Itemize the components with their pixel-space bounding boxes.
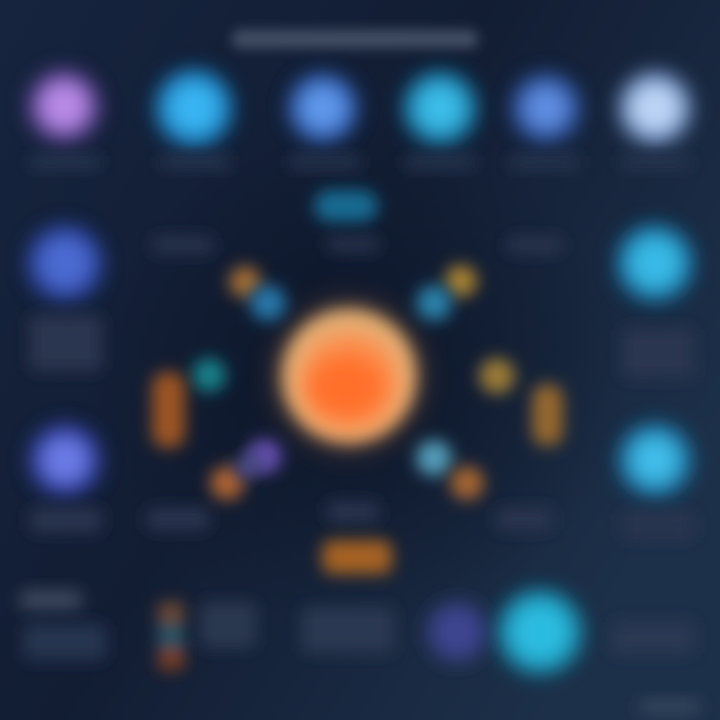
text block: bottom left label [20,590,82,610]
top centre pill [314,190,378,222]
top row captions [30,155,690,169]
capsule: lower left [210,439,282,500]
text block: bottom second [200,602,256,648]
right column icons [615,223,695,498]
icon: aqua circle [617,422,693,498]
top row icons [26,68,693,148]
orbit icons [152,265,563,574]
title [232,30,478,48]
side text blocks [30,237,694,538]
icon: dim violet circle [428,603,486,661]
bar: left orange [152,372,185,448]
icon: indigo circle [25,223,105,303]
icon: sky circle [615,223,695,303]
bottom row [20,588,700,714]
bottom centre pill [322,540,392,574]
icon: purple circle [26,68,102,144]
icon: cyan circle [154,68,234,148]
text block: bottom right [612,622,694,654]
bar: right amber [532,384,563,446]
icon: teal circle [402,70,478,146]
capsule: upper right [416,265,477,321]
icon: periwinkle circle [510,72,582,144]
left column icons [25,223,105,498]
icon: pale blue circle [617,70,693,146]
text block: bottom left body [24,624,106,660]
text block: bottom centre [302,607,394,653]
icon: blue circle [287,72,359,144]
capsule: upper left [229,266,286,321]
capsule: lower right [416,440,484,500]
icon: violet circle [27,422,103,498]
corner mark [640,700,700,714]
dot: teal [192,358,226,392]
central sun [275,302,423,450]
dot: amber [479,358,515,394]
icon: stacked chips [158,602,184,670]
icon: bright cyan circle [496,588,584,676]
